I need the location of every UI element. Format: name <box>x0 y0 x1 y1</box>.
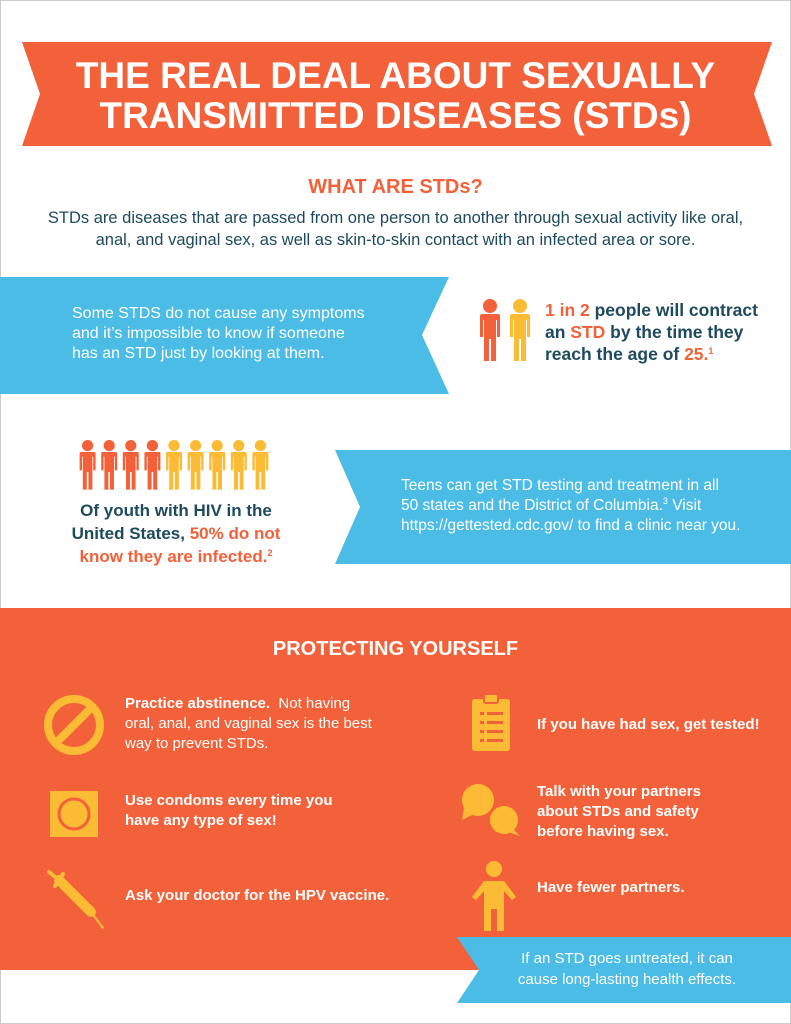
text: condoms: Use condoms every time you <box>125 792 333 809</box>
title: THE REAL DEAL ABOUT SEXUALLY <box>76 55 715 96</box>
text: abstinence <box>125 695 372 752</box>
definition text <box>48 209 743 249</box>
stat: 1 in 2 <box>545 300 758 364</box>
definition text: STDs are diseases that are passed from one person to another through sexual activity like oral, <box>48 209 743 227</box>
text: talk: before having sex. <box>537 823 669 840</box>
panel: no symptoms: has an STD just by looking at them. <box>72 345 325 362</box>
callout: untreated: If an STD goes untreated, it can <box>521 950 733 967</box>
title banner <box>22 42 772 146</box>
icon: speech bubbles <box>462 784 520 836</box>
text: talk: about STDs and safety <box>537 803 699 820</box>
icon: condom <box>50 791 98 837</box>
text: condoms: have any type of sex! <box>125 812 277 829</box>
heading: what are STDs: WHAT ARE STDs? <box>308 176 483 198</box>
text: abstinence: way to prevent STDs. <box>125 735 268 752</box>
panel: testing <box>335 450 791 564</box>
heading: PROTECTING YOURSELF <box>273 638 518 660</box>
panel: testing: 50 states and the District of Columbia.3 Visit <box>401 496 701 514</box>
text: get tested: If you have had sex, get tested! <box>537 716 760 733</box>
stat: youth with HIV: know they are infected.2 <box>79 547 272 566</box>
panel: protecting yourself <box>0 608 791 970</box>
panel: no symptoms <box>0 277 449 394</box>
icon: person <box>472 861 516 931</box>
icon: syringe <box>46 870 104 929</box>
panel: testing: Teens can get STD testing and treatment in all <box>401 477 719 494</box>
definition text: anal, and vaginal sex, as well as skin-to-skin contact with an infected area or sore. <box>96 231 695 249</box>
text: abstinence: oral, anal, and vaginal sex is the best <box>125 715 372 732</box>
panel: no symptoms: and it’s impossible to know if someone <box>72 325 345 342</box>
stat: youth with HIV: United States, 50% do not <box>72 524 280 543</box>
stat: youth with HIV: Of youth with HIV in the <box>80 501 272 520</box>
icon: prohibited <box>44 695 104 755</box>
callout: untreated: cause long-lasting health effects. <box>518 971 736 988</box>
text: talk: Talk with your partners <box>537 783 701 800</box>
icon: two people <box>480 299 530 361</box>
text: fewer partners: Have fewer partners. <box>537 879 685 896</box>
callout: untreated <box>457 937 791 1003</box>
icon: nine people <box>80 440 268 490</box>
stat: 1 in 2: reach the age of 25.1 <box>545 344 713 364</box>
title: TRANSMITTED DISEASES (STDs) <box>99 95 692 136</box>
text: talk <box>537 783 701 840</box>
stat: youth with HIV <box>72 501 280 566</box>
stat: 1 in 2: an STD by the time they <box>545 322 743 342</box>
text: abstinence: Practice abstinence. Not having <box>125 695 350 712</box>
stat: 1 in 2: 1 in 2 people will contract <box>545 300 758 320</box>
panel: testing: https://gettested.cdc.gov/ to find a clinic near you. <box>401 517 740 534</box>
panel: no symptoms: Some STDS do not cause any symptoms <box>72 305 365 322</box>
text: HPV: Ask your doctor for the HPV vaccine. <box>125 887 389 904</box>
text: condoms <box>125 792 333 829</box>
title <box>76 55 715 136</box>
icon: clipboard <box>472 695 510 751</box>
